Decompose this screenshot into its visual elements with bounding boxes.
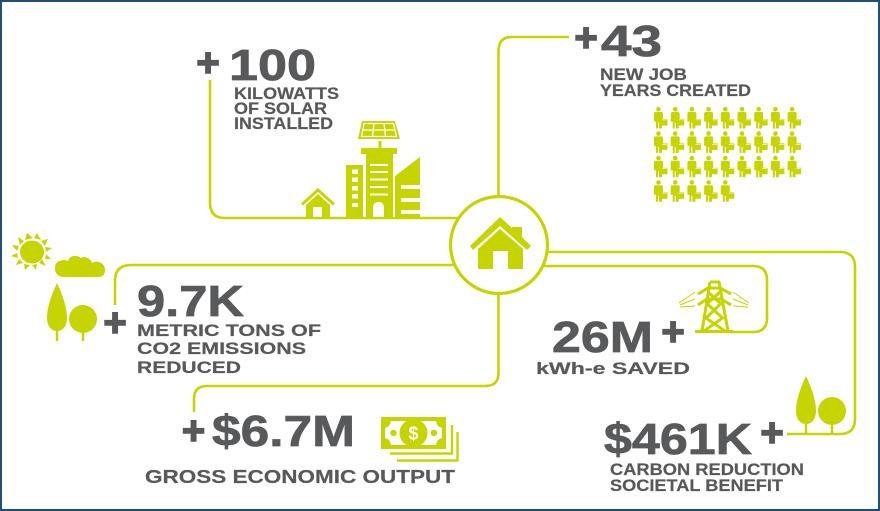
plus sign: + — [760, 411, 784, 455]
stat: energy saved — [536, 310, 690, 378]
connector: economic output — [194, 293, 498, 412]
icon: trees left — [47, 283, 97, 341]
central house badge — [450, 196, 548, 294]
number: 26M — [552, 313, 653, 362]
icon: house — [470, 217, 531, 269]
number: 9.7K — [137, 277, 244, 326]
connector: kWh saved — [543, 266, 767, 332]
label: OF SOLAR — [234, 100, 327, 118]
label: REDUCED — [137, 359, 241, 377]
label: NEW JOB — [600, 66, 687, 84]
icon: sun — [11, 233, 52, 270]
number: 43 — [601, 17, 662, 66]
label: SOCIETAL BENEFIT — [610, 477, 783, 495]
number: 100 — [229, 41, 316, 90]
label: INSTALLED — [234, 115, 333, 133]
icon: transmission tower — [679, 282, 749, 332]
icon: trees right — [796, 376, 846, 434]
connector: carbon benefit — [546, 252, 855, 434]
label — [610, 461, 804, 495]
icon: cloud — [55, 256, 105, 277]
label — [234, 85, 339, 133]
label: CARBON REDUCTION — [610, 461, 804, 479]
label: YEARS CREATED — [600, 82, 751, 100]
icon: stack of banknotes — [381, 417, 458, 460]
plus sign: + — [574, 16, 598, 60]
plus sign: + — [182, 409, 205, 453]
plus sign: + — [661, 310, 685, 354]
number: $6.7M — [212, 407, 355, 456]
connector: jobs — [498, 37, 569, 198]
label — [137, 322, 321, 377]
connector: solar — [210, 80, 462, 218]
stat: carbon benefit — [604, 411, 804, 495]
label: METRIC TONS OF — [137, 322, 321, 340]
icon grid: workers with briefcases — [654, 107, 801, 202]
icon: buildings with solar panel — [301, 121, 420, 218]
stat: emissions — [103, 277, 321, 377]
label — [600, 66, 751, 100]
label: CO2 EMISSIONS — [137, 340, 306, 358]
stat: job years — [574, 16, 751, 100]
stat: economic output — [145, 407, 455, 487]
stat: solar kilowatts — [196, 41, 339, 133]
label: GROSS ECONOMIC OUTPUT — [145, 467, 455, 487]
label: kWh-e SAVED — [536, 360, 690, 378]
connector: emissions — [115, 265, 456, 305]
number: $461K — [604, 415, 752, 464]
plus sign: + — [103, 301, 127, 345]
plus sign: + — [196, 41, 220, 85]
icon: stack of banknotes: $ — [408, 424, 419, 444]
label: KILOWATTS — [234, 85, 339, 103]
